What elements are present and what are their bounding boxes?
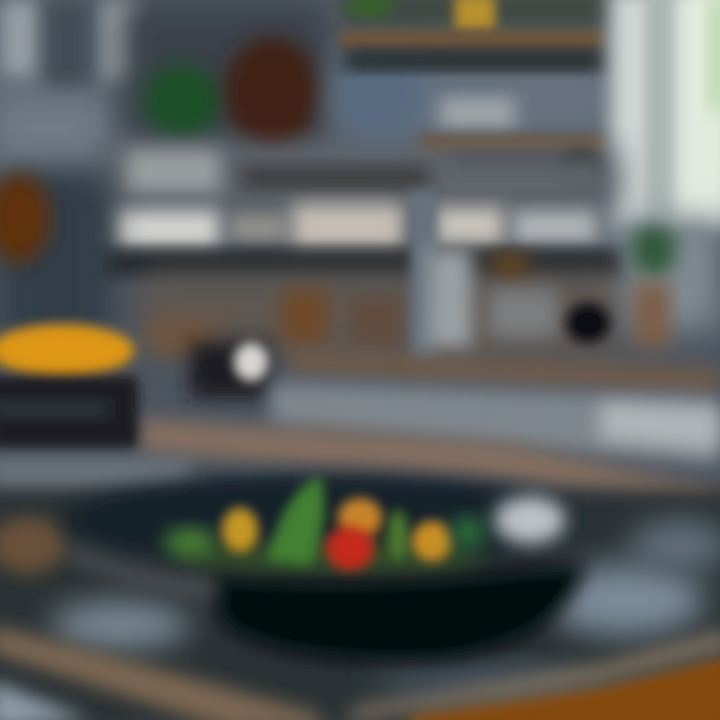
lower shelf with jars and bottles: [140, 190, 620, 360]
middle shelf with white crockery: [0, 150, 620, 350]
vegetables: [164, 475, 486, 570]
bright window: [610, 0, 720, 330]
orange wall disc: [0, 174, 50, 262]
stove top: [0, 490, 720, 720]
countertop edge and backsplash: [0, 350, 720, 512]
black wok with vegetables: [65, 474, 585, 661]
left pot with orange food: [0, 324, 138, 448]
wooden edge lower right: [350, 628, 720, 720]
wooden edge lower left: [0, 625, 320, 720]
background wall and upper shelving: [0, 0, 613, 198]
white highlight on dark jar: [190, 342, 270, 398]
potted plant: [632, 224, 676, 348]
